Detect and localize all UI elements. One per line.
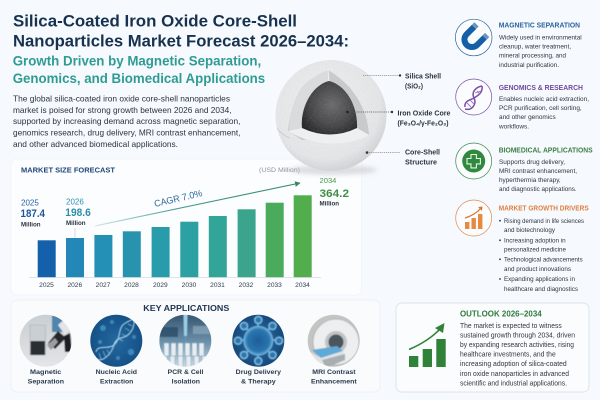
callout: 2026 value [65, 198, 91, 238]
callout: 2026 value: 198.6 [65, 207, 91, 219]
heading: KEY APPLICATIONS [143, 303, 230, 313]
application label: nucleic acid extraction: Extraction [100, 379, 133, 386]
application: nucleic acid extraction [90, 315, 142, 386]
label: silica shell: Silica Shell [405, 72, 441, 80]
callout: 2025 value: Million [21, 222, 41, 228]
subtitle [13, 52, 265, 86]
callout: 2025 value: 2025 [21, 198, 39, 208]
outlook text: healthcare investments, and the [460, 352, 556, 358]
panel: outlook [396, 303, 589, 392]
bar chart: 2033 [267, 282, 282, 289]
panel: market size forecast [11, 159, 362, 295]
title [13, 12, 349, 50]
feature text: Supports drug delivery, [499, 159, 565, 166]
feature text: and other genomics [499, 114, 556, 121]
subtitle: Genomics, and Biomedical Applications [13, 70, 265, 86]
label: core-shell structure [366, 148, 440, 166]
intro paragraph: genomics research, drug delivery, MRI contrast enhancement, [13, 127, 240, 137]
feature text: Enables nucleic acid extraction, [499, 96, 589, 103]
feature text: workflows. [498, 123, 529, 130]
label: iron oxide core [346, 108, 450, 128]
outlook text: sustained growth through 2034, driven [460, 332, 575, 340]
feature text [498, 83, 589, 130]
feature text: MARKET GROWTH DRIVERS [499, 204, 589, 212]
outlook text: by expanding research activities, rising [460, 342, 574, 349]
outlook text [460, 309, 575, 388]
outlook text: scientific and industrial applications. [460, 380, 567, 388]
callout: 2026 value: 2026 [66, 198, 84, 206]
feature: biomedical applications [456, 143, 593, 193]
bar chart: 2026 [67, 282, 82, 289]
bar chart [29, 195, 321, 289]
application: drug delivery and therapy: & Therapy [241, 379, 276, 386]
feature text: Widely used in environmental [499, 34, 582, 41]
bar chart: 2034 [295, 282, 310, 289]
application label: nucleic acid extraction: Nucleic Acid [96, 369, 137, 376]
feature text: MAGNETIC SEPARATION [499, 21, 580, 30]
label: iron oxide core: Iron Oxide Core [398, 108, 450, 118]
feature text: cleanup, water treatment, [499, 44, 571, 50]
bar chart: 2028 [124, 282, 139, 289]
feature text: industrial purification. [499, 62, 559, 69]
icon: DNA helix [456, 79, 492, 115]
outlook text: iron oxide nanoparticles in advanced [460, 371, 569, 378]
feature text: PCR purification, cell sorting, [499, 105, 582, 112]
bar chart: 2031 [210, 282, 225, 289]
feature text: personalized medicine [504, 246, 566, 254]
intro paragraph [13, 94, 240, 149]
title: Nanoparticles Market Forecast 2026–2034: [13, 31, 349, 50]
label: iron oxide core: (Fe₃O₄/γ-Fe₂O₃) [398, 118, 449, 128]
core-shell sphere illustration [275, 59, 387, 175]
bar chart: 2032 [239, 282, 254, 289]
application: magnetic separation: Separation [28, 379, 64, 386]
intro paragraph: and other advanced biomedical applications. [13, 139, 178, 149]
feature text: MRI contrast enhancement, [499, 168, 577, 175]
iron oxide core [302, 81, 357, 134]
callout: 2025 value [20, 198, 45, 228]
application: MRI contrast enhancement: Enhancement [311, 379, 358, 386]
feature text: Increasing adoption in [504, 238, 566, 244]
callout: 2025 value: 187.4 [20, 208, 45, 220]
feature text: Technological advancements [504, 256, 583, 264]
feature text: BIOMEDICAL APPLICATIONS [499, 146, 593, 154]
callout: 2034 value: Million [320, 200, 339, 208]
feature: market growth drivers [456, 200, 589, 293]
feature text: Rising demand in life sciences [504, 218, 585, 225]
bar chart: 2029 [153, 282, 168, 289]
feature text [499, 204, 589, 293]
callout: 2034 value [320, 176, 349, 208]
application: MRI contrast enhancement: MRI Contrast [312, 369, 356, 376]
application: drug delivery and therapy [232, 315, 284, 386]
outlook text: increasing adoption of silica-coated [460, 361, 567, 368]
title: Silica-Coated Iron Oxide Core-Shell [13, 12, 297, 31]
feature text: and biotechnology [504, 227, 556, 234]
feature text: GENOMICS & RESEARCH [499, 83, 583, 92]
outlook text: OUTLOOK 2026–2034 [460, 309, 542, 319]
icon: medical cross [456, 143, 492, 179]
unit label: (USD Million) [259, 167, 300, 174]
application: magnetic separation: Magnetic [30, 369, 62, 376]
callout: 2034 value: 364.2 [320, 188, 349, 200]
label: silica shell [363, 72, 441, 90]
callout: 2026 value: Million [66, 220, 86, 227]
cut wedge walls [288, 70, 369, 140]
intro paragraph: supported by increasing demand across magnetic separation, [13, 116, 240, 126]
intro paragraph: The global silica-coated iron oxide core-shell nanoparticles [13, 94, 230, 104]
bar chart: 2027 [96, 282, 111, 289]
callout: 2034 value: 2034 [320, 176, 336, 185]
feature: magnetic separation [455, 19, 582, 69]
application: PCR and cell isolation: PCR & Cell [168, 369, 204, 376]
application label: nucleic acid extraction [96, 369, 137, 386]
label: core-shell structure: Structure [405, 158, 437, 166]
application: MRI contrast enhancement [307, 314, 361, 386]
intro paragraph: market is poised for strong growth between 2026 and 2034, [13, 105, 232, 115]
application: drug delivery and therapy: Drug Delivery [236, 369, 281, 376]
label: silica shell: (SiO₂) [405, 82, 423, 90]
label: core-shell structure: Core-Shell [405, 148, 440, 156]
feature: genomics and research [456, 79, 589, 130]
application: PCR and cell isolation [159, 314, 213, 386]
icon: growth chart [456, 200, 492, 236]
feature text: mineral processing, and [499, 53, 566, 60]
icon: magnet [455, 19, 492, 56]
arrow: CAGR trend [95, 183, 300, 226]
feature text [499, 146, 593, 193]
subtitle: Growth Driven by Magnetic Separation, [13, 52, 261, 68]
feature text: and product innovations [504, 266, 572, 273]
panel: key applications [11, 300, 380, 392]
application: PCR and cell isolation: Isolation [172, 379, 200, 386]
feature text: healthcare and diagnostics [504, 286, 579, 293]
icon: rising bars with arrow [409, 323, 446, 367]
outlook text: The market is expected to witness [460, 323, 562, 330]
application: magnetic separation [19, 314, 74, 386]
feature text: and diagnostic applications. [499, 186, 577, 193]
CAGR label: CAGR 7.0% [153, 187, 203, 209]
bar chart: 2025 [39, 282, 54, 289]
chart heading: MARKET SIZE FORECAST [21, 166, 115, 174]
bar chart: 2030 [182, 282, 197, 289]
feature text: Expanding applications in [504, 276, 575, 283]
feature text: hyperthermia therapy, [499, 177, 561, 184]
feature text [499, 21, 582, 69]
